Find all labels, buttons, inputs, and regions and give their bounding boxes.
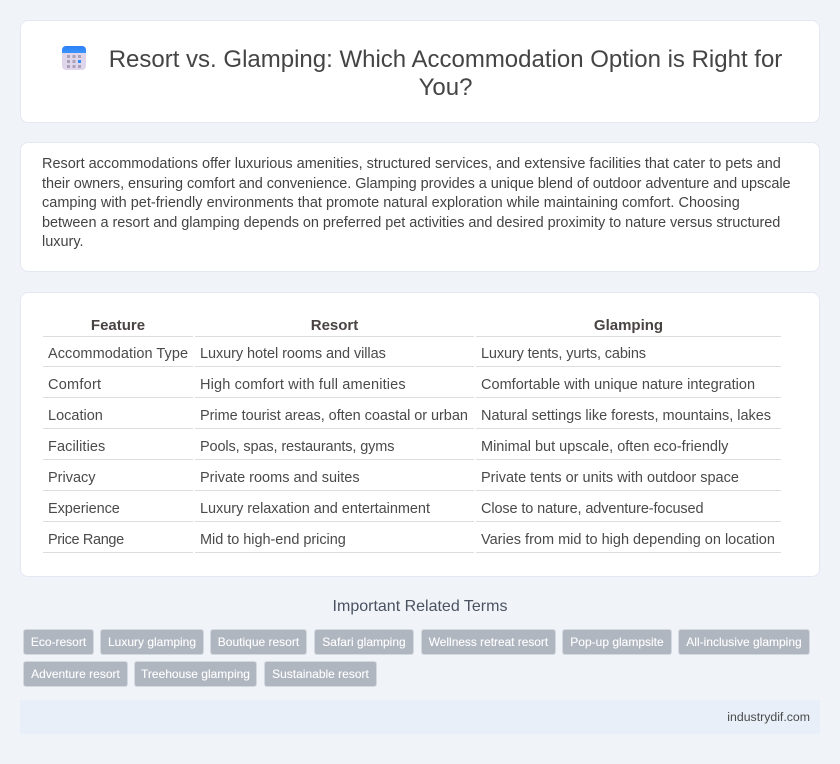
table rows: Varies from mid to high depending on location [481, 532, 775, 548]
table rows: Location [48, 408, 103, 424]
text block: introduction [42, 156, 790, 250]
heading: related terms: Important Related Terms [333, 598, 507, 615]
table rows: Experience [48, 501, 120, 517]
table rows: Private tents or units with outdoor space [481, 470, 739, 486]
table rows: Prime tourist areas, often coastal or urban [200, 408, 468, 424]
table rows: Mid to high-end pricing [200, 532, 346, 548]
related term tags [23, 629, 810, 687]
related term tags: Safari glamping [322, 635, 406, 649]
related term tags: Adventure resort [31, 667, 120, 681]
table rows: Natural settings like forests, mountains, lakes [481, 408, 771, 424]
related term tags: Pop-up glampsite [570, 635, 664, 649]
text block: introduction: their owners, ensuring comfort and convenience. Glamping provides a unique blend of outdoor adventure and upscale [42, 176, 790, 192]
table rows: Close to nature, adventure-focused [481, 501, 703, 517]
table rows: Price Range [48, 532, 124, 548]
table rows: Luxury hotel rooms and villas [200, 346, 386, 362]
icon: calendar [62, 46, 86, 70]
table rows: Luxury relaxation and entertainment [200, 501, 430, 517]
related term tags: Luxury glamping [108, 635, 196, 649]
title [109, 46, 782, 101]
table rows: Comfort [48, 377, 101, 393]
table rows: Facilities [48, 439, 105, 455]
related term tags: All-inclusive glamping [686, 635, 802, 649]
related term tags: Treehouse glamping [141, 667, 250, 681]
related term tags: Sustainable resort [272, 667, 369, 681]
text block: introduction: luxury. [42, 234, 84, 250]
table rows: Accommodation Type [48, 346, 188, 362]
footer bar [20, 700, 820, 734]
footer source: industrydif.com [727, 710, 810, 724]
related term tags: Boutique resort [218, 635, 299, 649]
related term tags: Eco-resort [31, 635, 86, 649]
table rows: Pools, spas, restaurants, gyms [200, 439, 394, 455]
table rows: Luxury tents, yurts, cabins [481, 346, 646, 362]
table rows: Privacy [48, 470, 96, 486]
text block: introduction: Resort accommodations offer luxurious amenities, structured services, and extensive facilities that cater to pets and [42, 156, 781, 172]
related term tags: Wellness retreat resort [429, 635, 548, 649]
table rows: Minimal but upscale, often eco-friendly [481, 439, 728, 455]
table rows: Private rooms and suites [200, 470, 360, 486]
title: Resort vs. Glamping: Which Accommodation Option is Right for [109, 46, 782, 73]
table rows: Comfortable with unique nature integration [481, 377, 755, 393]
panel: intro card [20, 142, 820, 272]
text block: introduction: camping with pet-friendly environments that promote natural exploration while maintaining comfort. Choosing [42, 195, 740, 211]
table header: Glamping [594, 317, 663, 334]
text block: introduction: between a resort and glamping depends on preferred pet activities and desired proximity to nature versus structured [42, 214, 780, 230]
panel: comparison table card [20, 292, 820, 577]
table rows: High comfort with full amenities [200, 377, 406, 393]
table header [43, 317, 781, 337]
title: You? [419, 74, 472, 101]
table header: Resort [311, 317, 358, 334]
table header: Feature [91, 317, 145, 334]
panel: header card [20, 20, 820, 123]
table rows [43, 346, 781, 553]
comparison table [43, 317, 781, 553]
